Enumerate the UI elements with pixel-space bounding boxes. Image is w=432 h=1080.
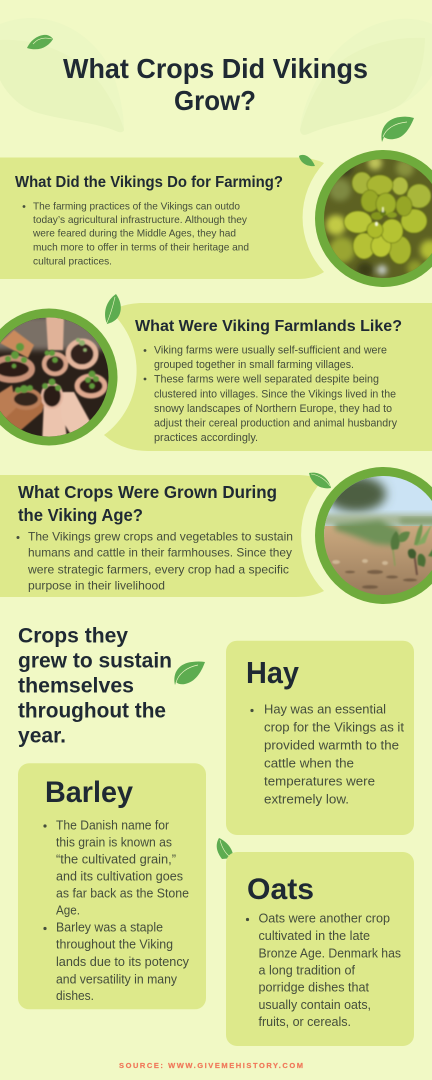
panel body text: practices accordingly. bbox=[154, 432, 258, 444]
card body: fruits, or cereals. bbox=[258, 1015, 351, 1029]
panel body text bbox=[144, 344, 398, 444]
panel body text: humans and cattle in their farmhouses. Since they bbox=[28, 547, 292, 560]
panel: crops during the Viking Age bbox=[0, 473, 331, 597]
panel body text: were strategic farmers, every crop had a specific bbox=[27, 563, 289, 576]
card body: cultivated in the late bbox=[258, 929, 370, 943]
card body: The Danish name for bbox=[56, 818, 169, 832]
photo: seedlings in soil bbox=[315, 467, 432, 604]
leaf: beside heading bbox=[174, 662, 205, 685]
title: Grow? bbox=[174, 85, 256, 116]
card body: crop for the Vikings as it bbox=[264, 720, 405, 734]
card body: extremely low. bbox=[264, 793, 349, 807]
cupped hands with soil bbox=[68, 341, 96, 367]
panel body text: today’s agricultural infrastructure. Although they bbox=[33, 215, 248, 226]
panel body text: Viking farms were usually self-sufficient and were bbox=[154, 344, 387, 356]
card heading: Oats bbox=[247, 873, 314, 906]
heading: crops they grew: throughout the bbox=[18, 699, 166, 722]
panel body text: clustered into villages. Since the Vikings lived in the bbox=[154, 388, 396, 400]
card body: as far back as the Stone bbox=[56, 887, 189, 901]
photo: hands holding seedlings bbox=[0, 308, 118, 446]
card heading: Barley bbox=[45, 776, 133, 809]
card body: temperatures were bbox=[264, 775, 375, 789]
card body: and its cultivation goes bbox=[56, 870, 183, 884]
panel body text: were feared during the Middle Ages, they had bbox=[32, 229, 236, 240]
heading: crops they grew: grew to sustain bbox=[18, 650, 172, 673]
background leaf: right bbox=[300, 19, 432, 135]
panel body text: much more to offer in terms of their heritage and bbox=[33, 243, 249, 254]
panel heading: What Did the Vikings Do for Farming? bbox=[15, 174, 283, 191]
heading: crops they grew bbox=[18, 625, 172, 748]
panel background bbox=[0, 158, 324, 279]
card heading: Hay bbox=[246, 655, 300, 690]
leaf on panel bbox=[105, 294, 121, 325]
panel background bbox=[104, 303, 432, 451]
card: oats bbox=[226, 852, 414, 1046]
card background bbox=[18, 763, 206, 1009]
panel: farming bbox=[0, 155, 324, 279]
card body: Bronze Age. Denmark has bbox=[258, 946, 401, 960]
card body: a long tradition of bbox=[258, 963, 356, 977]
card body bbox=[43, 818, 190, 1003]
panel: farmlands bbox=[104, 294, 432, 451]
panel body text bbox=[16, 531, 293, 593]
panel body text: adjust their cereal production and animal husbandry bbox=[154, 417, 398, 429]
leaf: above oats card bbox=[217, 838, 233, 859]
leaf: above first photo bbox=[381, 117, 414, 142]
panel body text bbox=[23, 202, 249, 267]
card body: this grain is known as bbox=[56, 836, 172, 850]
card body bbox=[246, 912, 401, 1029]
photo: flower bbox=[315, 150, 432, 287]
panel heading: What Crops Were Grown During bbox=[18, 482, 277, 502]
panel body text: cultural practices. bbox=[33, 256, 112, 267]
panel body text: snowy landscapes of Northern Europe, they had to bbox=[154, 403, 392, 415]
card body: and versatility in many bbox=[56, 972, 178, 986]
panel heading: the Viking Age? bbox=[18, 505, 143, 525]
card body: Age. bbox=[56, 904, 80, 918]
card body: provided warmth to the bbox=[264, 738, 399, 752]
panel body text: grouped together in small farming villages. bbox=[154, 359, 354, 371]
card body: dishes. bbox=[56, 989, 94, 1003]
heading: crops they grew: themselves bbox=[18, 675, 134, 698]
panel heading: What Were Viking Farmlands Like? bbox=[135, 318, 402, 335]
card body: lands due to its potency bbox=[56, 955, 190, 969]
card body: cattle when the bbox=[264, 757, 354, 771]
card background bbox=[226, 641, 414, 835]
card body bbox=[250, 703, 405, 807]
card body: Barley was a staple bbox=[56, 921, 163, 935]
panel body text: The Vikings grew crops and vegetables to sustain bbox=[28, 531, 293, 544]
panel body text: The farming practices of the Vikings can outdo bbox=[33, 202, 240, 212]
card body: throughout the Viking bbox=[56, 938, 173, 952]
card body: usually contain oats, bbox=[258, 998, 371, 1012]
leaf: top left bbox=[27, 35, 53, 49]
title: What Crops Did Vikings bbox=[63, 53, 368, 84]
panel background bbox=[0, 475, 324, 597]
leaf on panel bbox=[309, 473, 331, 488]
card body: porridge dishes that bbox=[258, 981, 370, 995]
panel body text: purpose in their livelihood bbox=[28, 580, 165, 593]
card background bbox=[226, 852, 414, 1046]
panel body text: These farms were well separated despite being bbox=[154, 374, 379, 386]
background leaf: left bbox=[0, 18, 124, 132]
source line: SOURCE: WWW.GIVEMEHISTORY.COM bbox=[119, 1061, 303, 1070]
card body: Hay was an essential bbox=[264, 703, 386, 717]
heading: crops they grew: year. bbox=[18, 725, 66, 748]
card: hay bbox=[226, 641, 414, 835]
heading: crops they grew: Crops they bbox=[18, 625, 128, 648]
card body: Oats were another crop bbox=[258, 912, 390, 926]
arms bbox=[46, 316, 64, 350]
card: barley bbox=[18, 763, 206, 1009]
panel heading bbox=[18, 482, 277, 525]
leaf on panel bbox=[299, 155, 315, 166]
card body: “the cultivated grain,” bbox=[56, 852, 176, 866]
title bbox=[63, 53, 368, 116]
